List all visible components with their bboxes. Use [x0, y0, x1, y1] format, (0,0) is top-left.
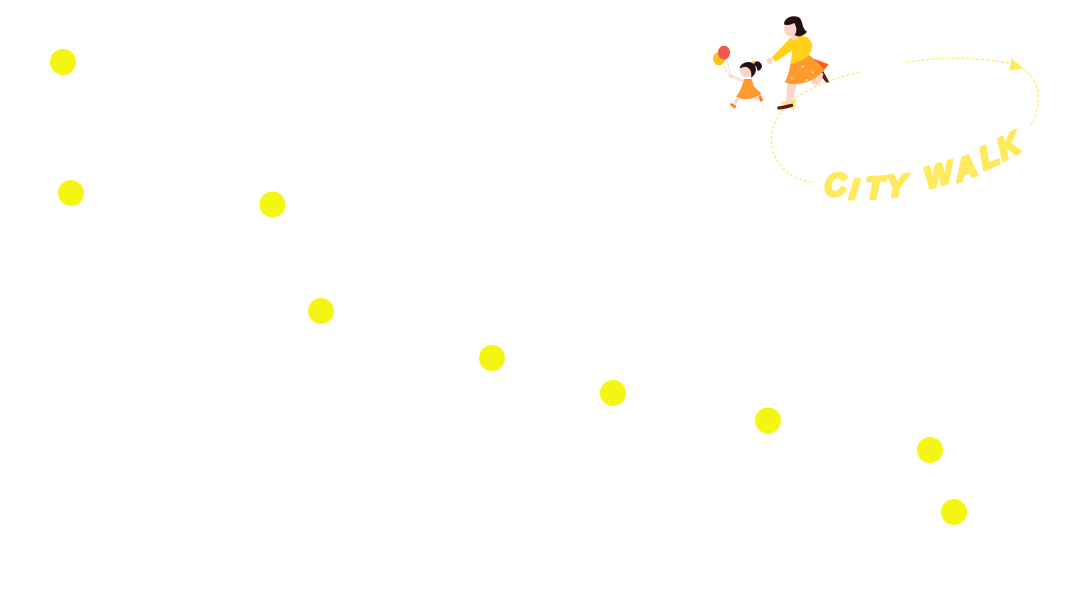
mother	[767, 16, 829, 109]
daughter	[729, 61, 763, 108]
illustration: mother and daughter running	[713, 16, 829, 110]
title: CITY WALK: L	[974, 136, 1004, 177]
yellow star under foot	[779, 99, 797, 110]
title: CITY WALK: C	[823, 166, 848, 204]
title: CITY WALK: I	[848, 174, 861, 206]
dashed route loop with arrow	[771, 58, 1038, 182]
map marker dots	[50, 49, 967, 525]
balloons	[713, 46, 731, 76]
title: CITY WALK: T	[865, 170, 887, 206]
title: CITY WALK	[823, 124, 1028, 206]
title: CITY WALK: Y	[886, 167, 910, 204]
title: CITY WALK: W	[922, 155, 958, 196]
title: CITY WALK: K	[992, 124, 1028, 167]
title: CITY WALK: A	[949, 147, 981, 189]
